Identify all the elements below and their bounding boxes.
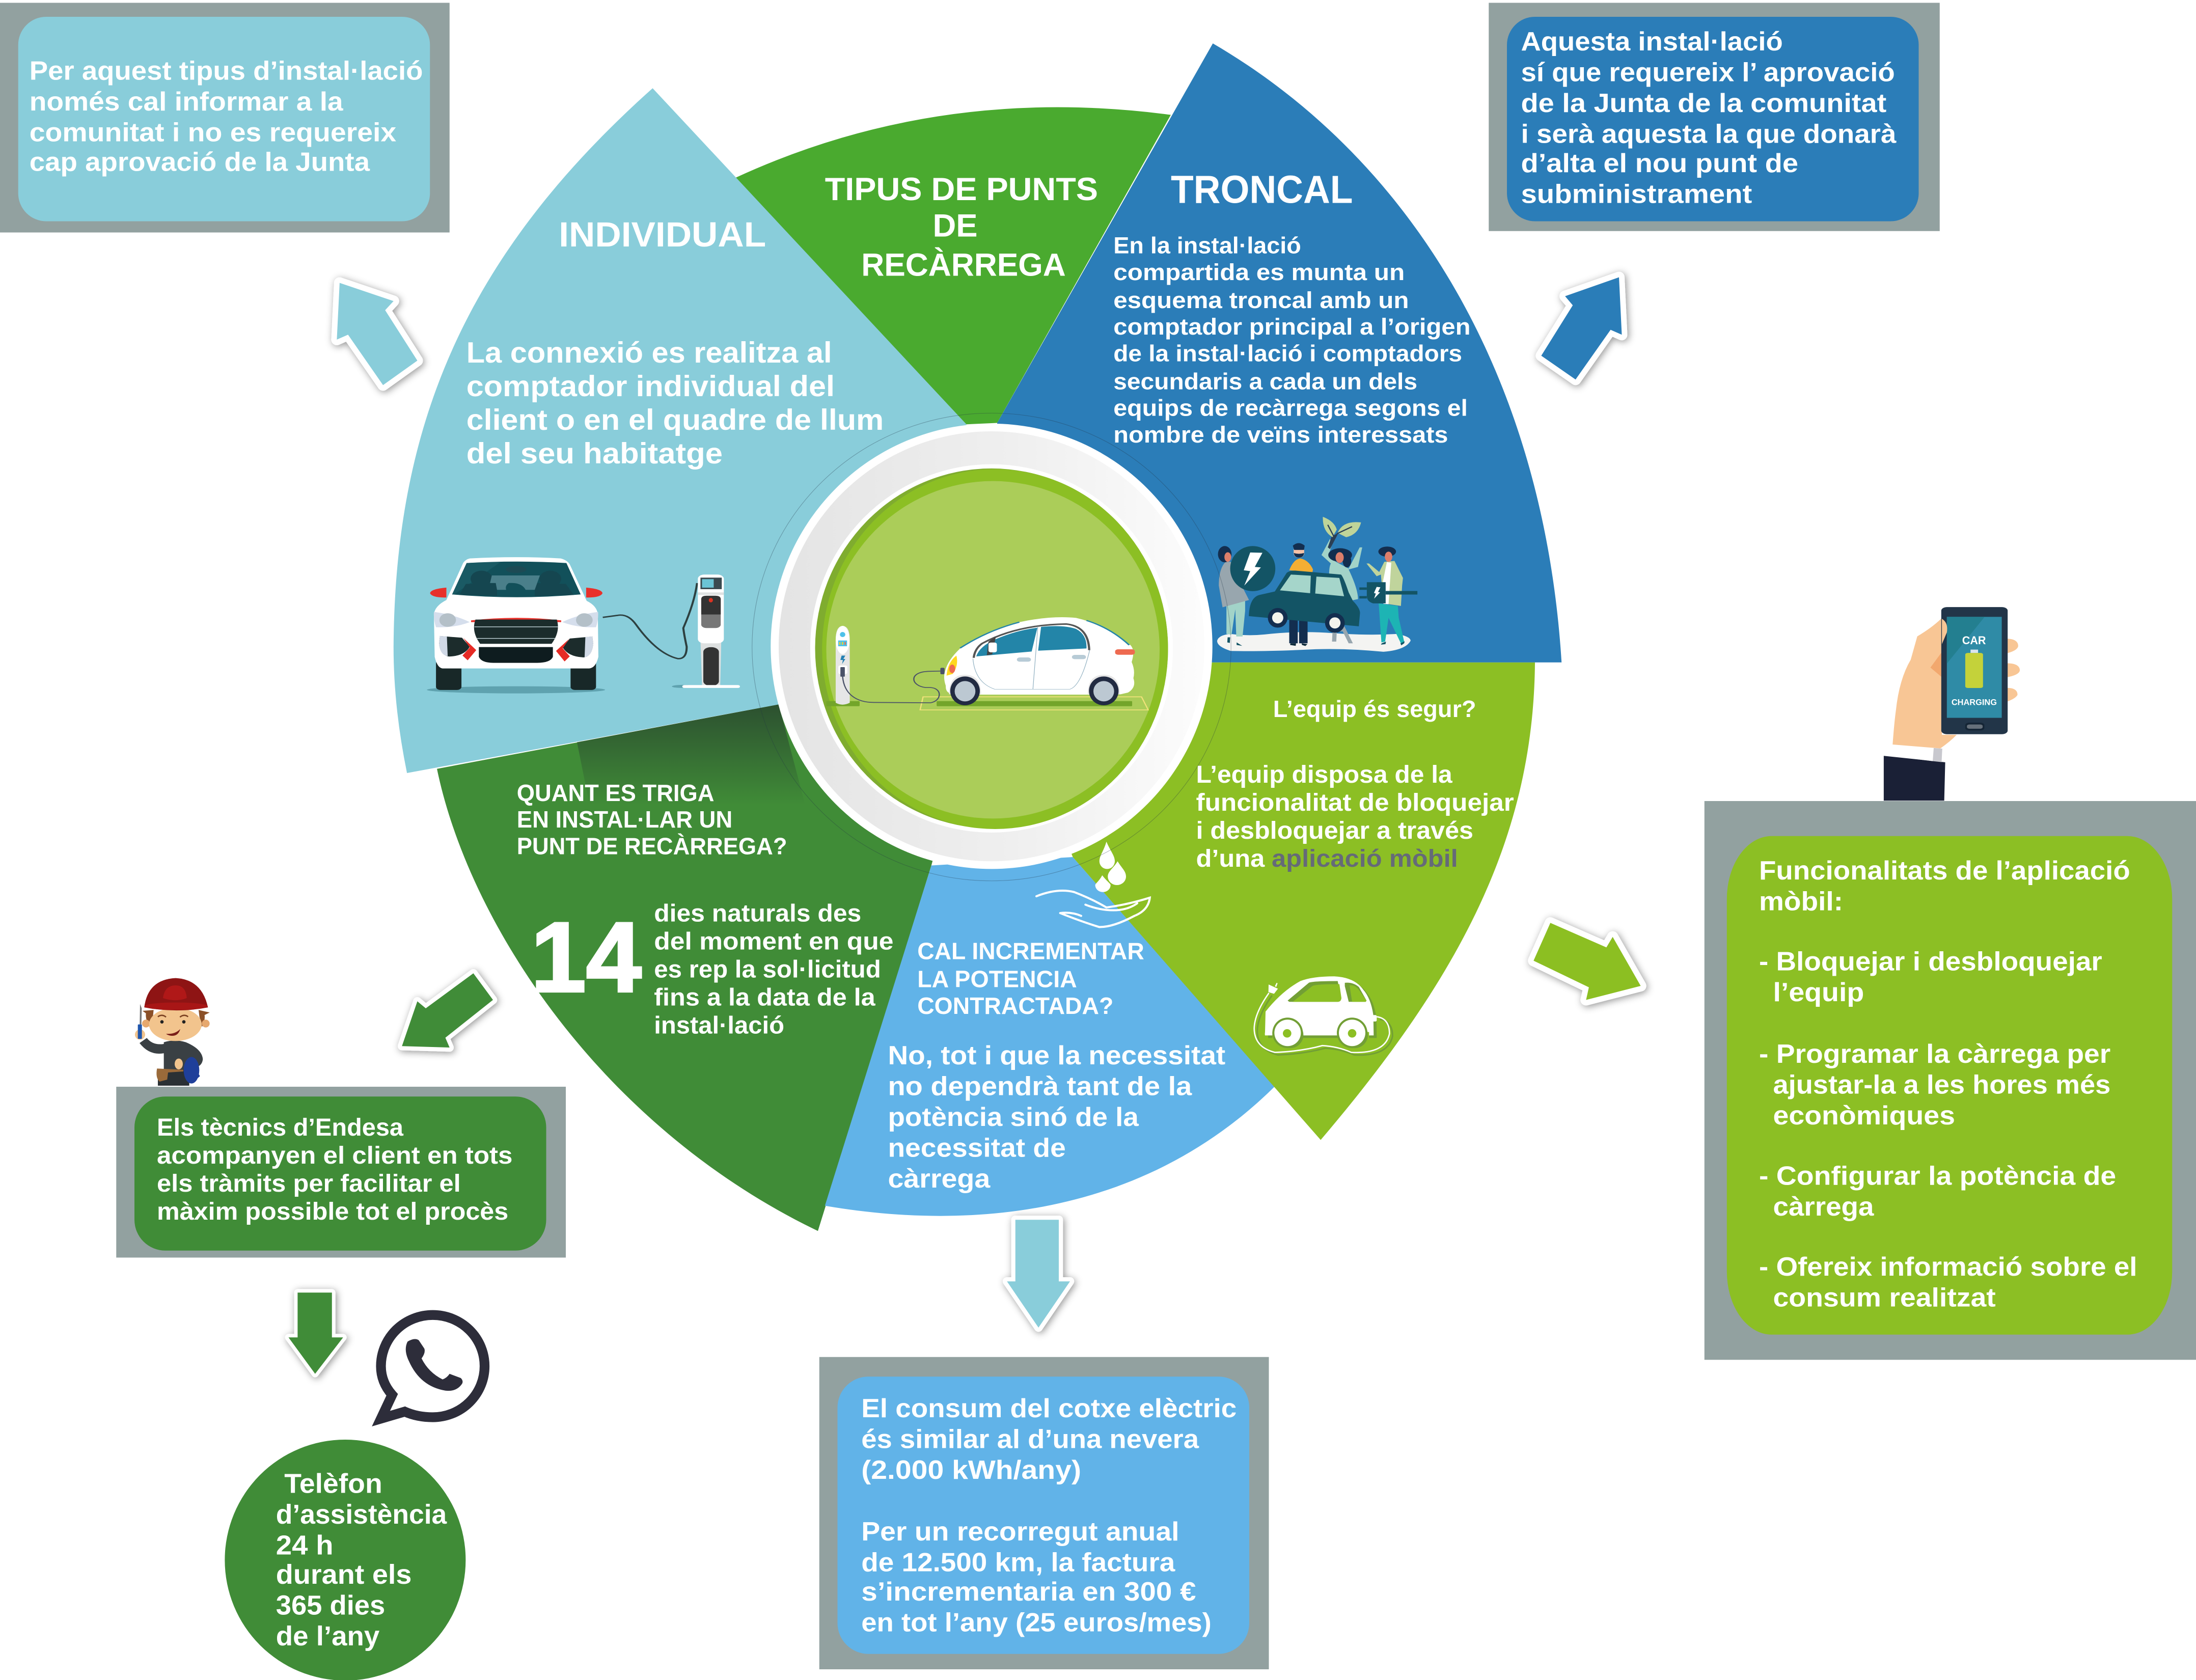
text: troncal note: [1521, 27, 1897, 209]
illustration: technician: [135, 978, 210, 1086]
text: connexió individual: comptador individual del: [466, 370, 835, 403]
heading: cal incrementar: CONTRACTADA?: [917, 993, 1113, 1019]
text: technicians: Els tècnics d’Endesa: [157, 1114, 404, 1141]
text: necessitat de càrrega: no dependrà tant de la: [888, 1071, 1192, 1101]
text: technicians: acompanyen el client en tots: [157, 1142, 513, 1169]
text: mobile app features: consum realitzat: [1773, 1283, 1996, 1313]
icon: water drops: [1095, 842, 1126, 892]
text: mobile app features: - Ofereix informació sobre el: [1759, 1252, 2137, 1282]
text: aplicació mòbil: aplicació mòbil: [1272, 845, 1458, 872]
text: instal·lació compartida: nombre de veïns interessats: [1113, 422, 1448, 448]
text: technicians: els tràmits per facilitar el: [157, 1170, 461, 1197]
text: mobile app features: ajustar-la a les hores més: [1773, 1070, 2110, 1100]
illustration: group of people with car: [1217, 517, 1417, 652]
sector: troncal: [992, 43, 1561, 663]
text: technicians: màxim possible tot el procès: [157, 1198, 508, 1225]
text: connexió individual: La connexió es realitza al: [466, 337, 832, 369]
text: instal·lació compartida: esquema troncal amb un: [1113, 287, 1409, 313]
text: aplicació mòbil: L’equip disposa de la: [1196, 761, 1453, 788]
arrow: to mobile app panel: [1533, 923, 1641, 1000]
heading: tipus de punts de recàrrega: TIPUS DE PUNTS: [825, 172, 1098, 207]
text: mobile app features: Funcionalitats de l’aplicació: [1759, 856, 2130, 886]
sector: l'equip és segur: [992, 647, 1535, 1140]
text: dies naturals: dies naturals des: [654, 899, 861, 927]
panel: individual note: [0, 3, 450, 232]
heading: quant es triga: QUANT ES TRIGA: [517, 780, 715, 806]
arrow: to technicians panel: [402, 973, 493, 1048]
sector: cal incrementar la potència: [825, 857, 1274, 1216]
text: mobile app features: - Bloquejar i desbloquejar: [1759, 947, 2102, 977]
text: instal·lació compartida: secundaris a cada un dels: [1113, 368, 1417, 394]
icon: hand outline: [1036, 891, 1150, 927]
text: troncal note: de la Junta de la comunitat: [1521, 89, 1886, 118]
text: consumption: s’incrementaria en 300 €: [861, 1577, 1196, 1607]
panel: consumption: [819, 1357, 1269, 1669]
text: individual note: [30, 57, 423, 177]
text: troncal note: d’alta el nou punt de: [1521, 149, 1798, 178]
text: troncal note: sí que requereix l’ aprovació: [1521, 58, 1895, 87]
heading: quant es triga: EN INSTAL·LAR UN: [517, 806, 732, 833]
text: mobile app features: [1759, 856, 2137, 1313]
text: connexió individual: [466, 337, 884, 470]
text: aplicació mòbil: i desbloquejar a través: [1196, 817, 1473, 844]
heading: cal incrementar: CAL INCREMENTAR: [917, 938, 1144, 965]
text: consumption: de 12.500 km, la factura: [861, 1548, 1175, 1577]
text: 24h assistance: d’assistència: [276, 1499, 447, 1530]
text: dies naturals: del moment en que: [654, 927, 894, 955]
text: 24h assistance: Telèfon: [284, 1468, 382, 1499]
text: individual note: Per aquest tipus d’instal·lació: [30, 57, 423, 86]
text: connexió individual: del seu habitatge: [466, 437, 723, 470]
heading: tipus de punts de recàrrega: DE: [933, 208, 978, 244]
illustration: hand holding phone: [1884, 607, 2020, 801]
label: car: CAR: [1962, 634, 1986, 647]
heading: quant es triga: PUNT DE RECÀRREGA?: [517, 833, 787, 859]
center circle: charging car: [752, 413, 1231, 881]
text: mobile app features: econòmiques: [1773, 1101, 1955, 1131]
text: instal·lació compartida: de la instal·lació i comptadors: [1113, 340, 1462, 366]
text: 24h assistance: durant els: [276, 1559, 412, 1590]
panel: troncal note: [1489, 3, 1940, 231]
text: necessitat de càrrega: No, tot i que la necessitat: [888, 1041, 1225, 1070]
text: troncal note: subministrament: [1521, 180, 1752, 209]
arrow: to individual note: [337, 283, 418, 385]
text: 24h assistance: 24 h: [276, 1530, 334, 1560]
text: connexió individual: client o en el quadre de llum: [466, 404, 884, 436]
text: 24h assistance: [276, 1468, 447, 1651]
text: consumption: és similar al d’una nevera: [861, 1424, 1199, 1454]
text: consumption: Per un recorregut anual: [861, 1517, 1179, 1547]
text: consumption: (2.000 kWh/any): [861, 1455, 1081, 1485]
panel: mobile app features: [1705, 801, 2196, 1360]
text: dies naturals: es rep la sol·licitud: [654, 955, 881, 983]
text: consumption: El consum del cotxe elèctric: [861, 1394, 1237, 1423]
heading: quant es triga: [517, 780, 787, 859]
label: charging: CHARGING: [1952, 697, 1997, 707]
heading: l'equip és segur: L’equip és segur?: [1273, 696, 1476, 722]
illustration: front car with charging post: [427, 557, 740, 694]
text: individual note: cap aprovació de la Junta: [30, 147, 370, 177]
text: mobile app features: - Programar la càrrega per: [1759, 1039, 2110, 1069]
heading: cal incrementar: LA POTENCIA: [917, 966, 1077, 993]
sector: individual: [394, 88, 992, 773]
text: individual note: només cal informar a la: [30, 87, 344, 117]
heading: individual: INDIVIDUAL: [559, 215, 766, 254]
icon: electric car outline: [1254, 976, 1392, 1055]
text: mobile app features: càrrega: [1773, 1192, 1874, 1222]
heading: tipus de punts de recàrrega: [825, 172, 1098, 283]
arrow: to troncal note: [1541, 277, 1622, 379]
text: instal·lació compartida: En la instal·lació: [1113, 233, 1301, 259]
text: mobile app features: - Configurar la potència de: [1759, 1161, 2116, 1191]
text: instal·lació compartida: compartida es munta un: [1113, 259, 1405, 285]
illustration: side car charging: [827, 617, 1148, 710]
text: troncal note: i serà aquesta la que donarà: [1521, 119, 1897, 149]
text: technicians: [157, 1114, 513, 1225]
sector: quant es triga: [437, 647, 992, 1231]
text: aplicació mòbil: d’una: [1196, 845, 1266, 872]
text: mobile app features: l’equip: [1773, 978, 1864, 1007]
text: consumption: en tot l’any (25 euros/mes): [861, 1608, 1212, 1638]
text: mobile app features: mòbil:: [1759, 887, 1843, 916]
arrow: to assistance phone: [289, 1292, 343, 1374]
icon: whatsapp: [381, 1315, 485, 1419]
text: consumption: [861, 1394, 1237, 1638]
number: 14 dies: 14: [531, 902, 642, 1013]
heading: troncal: TRONCAL: [1171, 168, 1353, 212]
text: instal·lació compartida: equips de recàrrega segons el: [1113, 395, 1468, 421]
text: 24h assistance: 365 dies: [276, 1590, 385, 1621]
text: dies naturals: instal·lació: [654, 1011, 784, 1039]
text: necessitat de càrrega: càrrega: [888, 1164, 991, 1194]
text: necessitat de càrrega: potència sinó de la: [888, 1103, 1139, 1132]
circle: 24h assistance: [225, 1440, 465, 1680]
arrow: to consumption panel: [1007, 1220, 1070, 1328]
text: troncal note: Aquesta instal·lació: [1521, 27, 1783, 57]
text: aplicació mòbil: [1196, 761, 1514, 872]
text: dies naturals: fins a la data de la: [654, 983, 876, 1011]
text: 24h assistance: de l’any: [276, 1621, 379, 1651]
text: instal·lació compartida: [1113, 233, 1470, 448]
text: individual note: comunitat i no es requereix: [30, 118, 396, 148]
text: necessitat de càrrega: [888, 1041, 1225, 1194]
text: dies naturals: [654, 899, 894, 1039]
heading: tipus de punts de recàrrega: RECÀRREGA: [861, 247, 1066, 283]
heading: cal incrementar: [917, 938, 1144, 1019]
sector: tipus de punts de recàrrega: [735, 107, 1171, 424]
text: instal·lació compartida: comptador principal a l’origen: [1113, 314, 1470, 340]
text: necessitat de càrrega: necessitat de: [888, 1133, 1066, 1163]
text: aplicació mòbil: funcionalitat de bloquejar: [1196, 789, 1514, 816]
panel: technicians: [116, 1087, 566, 1257]
